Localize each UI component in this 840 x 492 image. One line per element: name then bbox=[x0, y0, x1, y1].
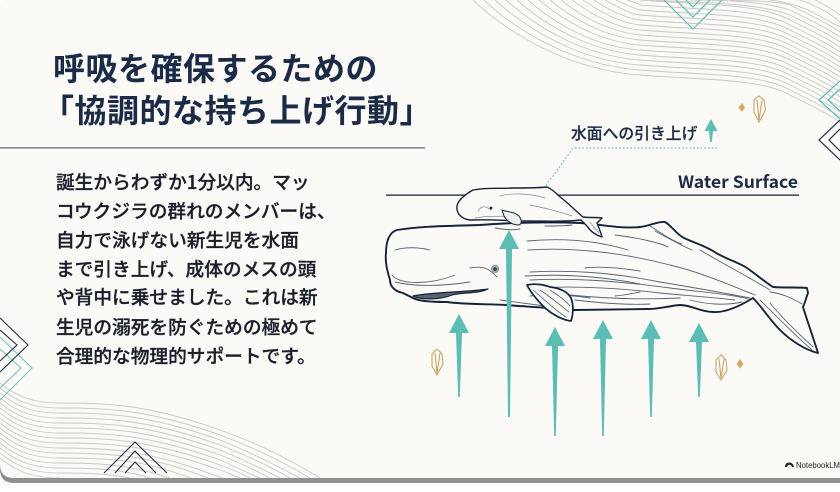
icon: gold small diamond bottom right bbox=[736, 359, 744, 368]
icon: gold crystal top right bbox=[754, 96, 766, 122]
decoration: right edge diamonds bbox=[819, 81, 840, 160]
whale eye bbox=[491, 265, 499, 273]
header rule bbox=[0, 147, 425, 149]
whale mouth bbox=[413, 289, 488, 299]
arrow 6 bbox=[689, 323, 709, 397]
illustration: baby whale bbox=[457, 187, 602, 237]
decoration: top right teal diamonds bbox=[664, 0, 722, 29]
body text: 誕生からわずか1分以内。マッ bbox=[56, 168, 310, 195]
icon: gold small diamond top right bbox=[738, 103, 745, 112]
body text: まで引き上げ、成体のメスの頭 bbox=[56, 255, 317, 282]
title: 「協調的な持ち上げ行動」 bbox=[42, 86, 432, 132]
title: 呼吸を確保するための bbox=[53, 44, 378, 90]
dotted callout leader bbox=[545, 148, 717, 187]
body text bbox=[56, 168, 336, 369]
icon: gold crystal left bbox=[432, 349, 443, 375]
illustration: adult sperm whale bbox=[386, 222, 818, 353]
water surface line bbox=[386, 194, 799, 196]
body text: 合理的な物理的サポートです。 bbox=[56, 342, 316, 369]
body text: 自力で泳げない新生児を水面 bbox=[56, 226, 299, 253]
whale flipper bbox=[527, 284, 573, 321]
label: lift to surface: 水面への引き上げ bbox=[571, 121, 698, 144]
title bbox=[42, 44, 432, 132]
arrow 5 bbox=[641, 320, 661, 417]
label: water surface: Water Surface bbox=[678, 168, 798, 193]
arrow 4 bbox=[593, 320, 613, 436]
arrow 2 bbox=[499, 230, 519, 417]
arrow 3 bbox=[545, 327, 565, 436]
decoration: bottom triangle chevrons bbox=[104, 442, 167, 473]
body text: コウクジラの群れのメンバーは、 bbox=[56, 197, 336, 224]
icon: small teal up arrow bbox=[704, 119, 718, 142]
body text: 生児の溺死を防ぐための極めて bbox=[56, 313, 318, 340]
decoration: left edge chevrons bbox=[0, 318, 32, 400]
teal lifting arrows bbox=[449, 230, 709, 436]
icon: gold crystal bottom right bbox=[716, 355, 727, 380]
body text: や背中に乗せました。これは新 bbox=[56, 283, 318, 310]
arrow 1 bbox=[449, 314, 469, 397]
